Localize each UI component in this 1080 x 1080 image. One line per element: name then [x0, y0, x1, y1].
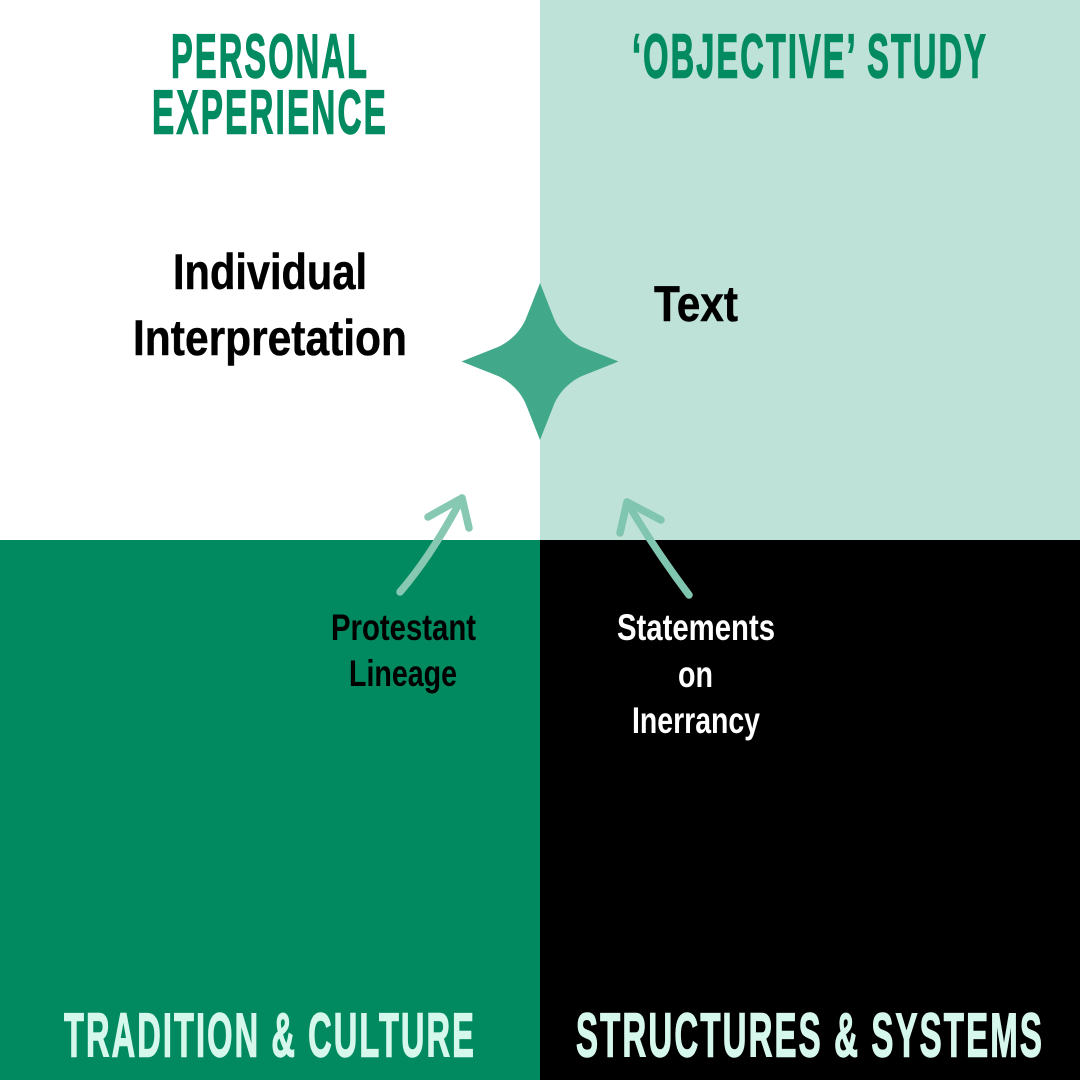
icon: four-point star [462, 283, 618, 440]
text: protestant lineage [331, 607, 476, 694]
heading: personal experience: EXPERIENCE [152, 78, 388, 148]
panel: tradition and culture [0, 540, 540, 1080]
arrow: statements on inerrancy to text [620, 502, 689, 595]
panel: structures and systems [540, 540, 1080, 1080]
text: statements on inerrancy: Inerrancy [632, 700, 760, 741]
text: protestant lineage: Lineage [349, 653, 457, 694]
text: individual interpretation [133, 244, 407, 366]
heading: personal experience [152, 22, 388, 148]
text: protestant lineage: Protestant [331, 607, 476, 648]
panel: personal experience [0, 0, 540, 540]
text: statements on inerrancy [617, 607, 775, 741]
text: individual interpretation: Individual [173, 244, 367, 300]
text: statements on inerrancy: Statements [617, 607, 775, 648]
heading: tradition and culture: TRADITION & CULTURE [64, 1002, 476, 1070]
arrow: protestant lineage to individual interpretation [400, 498, 469, 592]
heading: personal experience: PERSONAL [171, 22, 369, 92]
text: text label: Text [654, 276, 738, 332]
text: individual interpretation: Interpretation [133, 310, 407, 366]
text: statements on inerrancy: on [678, 654, 713, 695]
panel: objective study [540, 0, 1080, 540]
